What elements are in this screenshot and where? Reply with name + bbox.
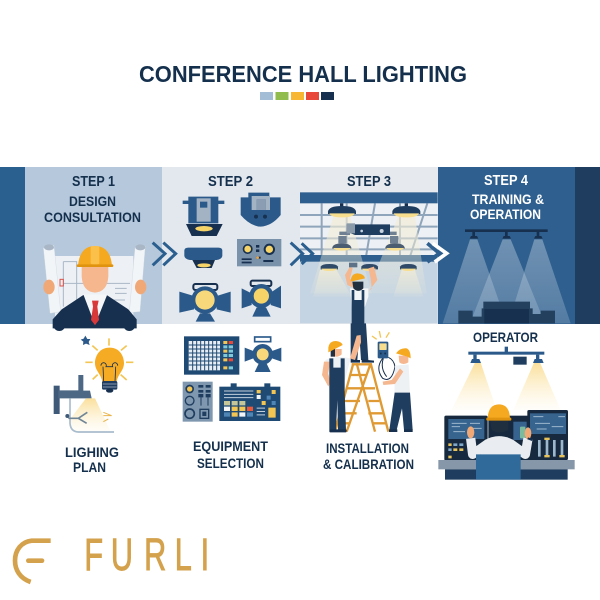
arrows: step 2 to 3 and step 3 to 4 bbox=[291, 243, 447, 265]
step 4 subtitle: TRAINING & bbox=[472, 191, 544, 207]
ceiling lamps bbox=[321, 203, 420, 271]
step 1 subtitle: DESIGN bbox=[69, 193, 116, 209]
step 2 heading: STEP 2 bbox=[208, 173, 253, 190]
right worker bbox=[383, 348, 413, 432]
icon: downlight bbox=[184, 248, 222, 268]
spotlight bbox=[245, 337, 281, 372]
small gear bbox=[81, 336, 90, 345]
wall arm lamp bbox=[54, 375, 114, 432]
logo: furli bbox=[15, 530, 209, 582]
label: equipment selection: EQUIPMENT bbox=[193, 438, 268, 454]
label: operator: OPERATOR bbox=[473, 329, 538, 345]
panel: step 1 design consultation bbox=[43, 173, 146, 331]
left worker bbox=[322, 335, 361, 432]
ladder bbox=[335, 363, 388, 432]
icon: engineer holding blueprint bbox=[43, 244, 146, 331]
monitors bbox=[444, 410, 568, 461]
label: installation and calibration bbox=[323, 440, 414, 472]
arrow: step 1 to 2 bbox=[153, 243, 176, 265]
dial panel bbox=[183, 382, 213, 422]
button panel bbox=[219, 383, 280, 421]
panel: step 4 training and operation bbox=[443, 172, 571, 323]
label: equipment selection bbox=[193, 438, 268, 471]
step 1 subtitle bbox=[44, 193, 141, 225]
track lights bbox=[452, 347, 561, 410]
meter bbox=[372, 331, 395, 379]
label: lighting plan bbox=[65, 444, 119, 475]
title: CONFERENCE HALL LIGHTING bbox=[139, 61, 467, 87]
icons: light fixtures bbox=[179, 193, 281, 322]
operator bbox=[467, 404, 532, 480]
label: lighting plan: PLAN bbox=[73, 459, 106, 475]
icon: installation workers and ladder bbox=[322, 323, 413, 432]
icon: fixture 1 bbox=[183, 197, 224, 236]
icon: operator at console bbox=[438, 347, 575, 480]
icon: equipment selection bbox=[183, 336, 281, 422]
label: installation and calibration: INSTALLATION bbox=[326, 440, 409, 456]
step 3 heading: STEP 3 bbox=[347, 173, 391, 190]
icon: spotlight 1 bbox=[179, 284, 231, 322]
logo wordmark: FURLI bbox=[84, 530, 209, 581]
colour swatches bbox=[260, 92, 334, 100]
band background bbox=[0, 167, 600, 324]
step 4 heading: STEP 4 bbox=[484, 172, 529, 189]
label: equipment selection: SELECTION bbox=[197, 455, 264, 471]
grid console bbox=[184, 336, 239, 375]
panel: step 2 equipment bbox=[179, 173, 281, 322]
icon: worker on ladder bbox=[345, 263, 377, 333]
icon: control panel bbox=[237, 239, 281, 266]
step 4 subtitle bbox=[470, 191, 544, 222]
logo mark bbox=[15, 541, 51, 582]
panel: step 3 installation bbox=[300, 173, 438, 323]
step 1 subtitle: CONSULTATION bbox=[44, 209, 141, 225]
icon: lighting plan bulb bbox=[54, 336, 133, 432]
ceiling and lights bbox=[300, 192, 438, 323]
step 4 subtitle: OPERATION bbox=[470, 206, 541, 222]
lightbulb bbox=[85, 338, 133, 393]
label: lighting plan: LIGHING bbox=[65, 444, 119, 460]
icon: spotlight 2 bbox=[242, 281, 281, 317]
step 1 heading: STEP 1 bbox=[72, 173, 115, 190]
upper worker legs bbox=[351, 323, 368, 360]
icon: fixture 2 bbox=[241, 193, 281, 227]
stage lights and stage bbox=[443, 229, 571, 323]
console desk bbox=[438, 460, 575, 480]
label: installation and calibration: & CALIBRATION bbox=[323, 456, 414, 472]
